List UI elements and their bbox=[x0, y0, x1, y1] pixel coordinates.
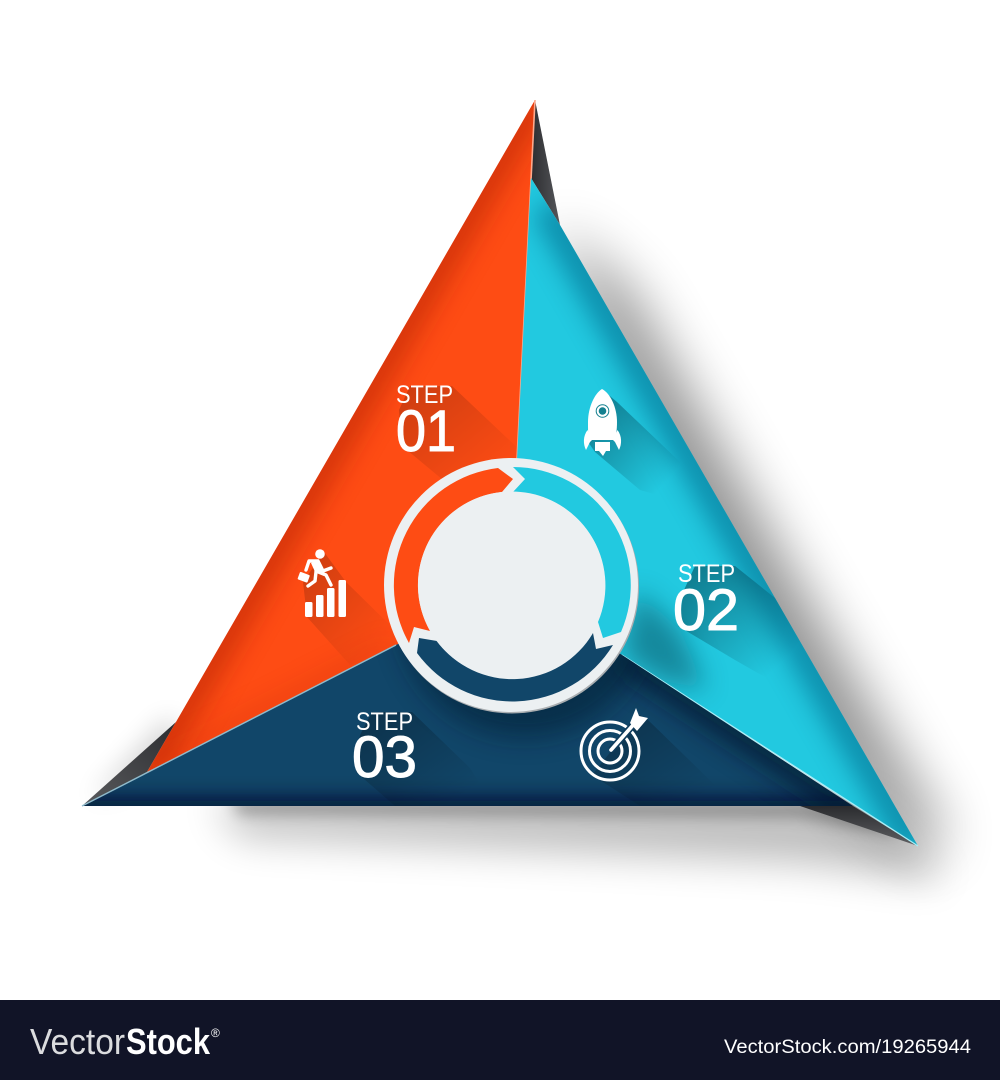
footer logo: Stock bbox=[126, 1021, 211, 1062]
step 03 number: 03 bbox=[352, 725, 417, 790]
long shadow: runner icon bbox=[303, 553, 380, 659]
folded dark tip: left bbox=[82, 722, 176, 806]
arrow: cyan segment bbox=[513, 467, 631, 638]
long shadow: ring on navy bbox=[395, 644, 644, 745]
folded dark tip: right bbox=[800, 806, 918, 846]
center ring with circular arrows bbox=[384, 458, 639, 714]
long shadow: step 02 text bbox=[678, 566, 792, 670]
long shadow: step 01 text bbox=[399, 386, 510, 478]
icon: runner climbing bar chart bbox=[297, 549, 346, 617]
footer image id: VectorStock.com/19265944 bbox=[724, 1036, 971, 1058]
arrow: orange segment bbox=[394, 468, 513, 643]
icon: target with arrow bbox=[581, 708, 648, 780]
footer bar bbox=[0, 1000, 1000, 1080]
footer logo: ® bbox=[211, 1026, 220, 1040]
step 02 number: 02 bbox=[673, 578, 739, 643]
footer logo bbox=[30, 1021, 220, 1062]
long shadow: rocket icon bbox=[589, 395, 672, 491]
folded dark tip: top bbox=[531, 100, 560, 225]
long shadow: target icon bbox=[594, 715, 691, 796]
arrow: navy segment bbox=[417, 633, 613, 701]
panel: step 02 cyan bbox=[511, 178, 918, 846]
step 02 label: STEP bbox=[678, 560, 735, 588]
soft drop shadow behind triangle bbox=[90, 225, 945, 880]
long shadow: step 03 text bbox=[356, 712, 458, 796]
icon: rocket bbox=[584, 389, 621, 456]
step 03 label: STEP bbox=[356, 708, 413, 736]
step 01 label: STEP bbox=[396, 381, 453, 409]
footer logo: Vector bbox=[30, 1021, 125, 1062]
panel: step 01 orange bbox=[147, 100, 535, 772]
center disc bbox=[418, 492, 605, 678]
step 01 number: 01 bbox=[396, 399, 456, 464]
panel: step 03 navy bbox=[82, 644, 853, 806]
long shadow: ring on cyan bbox=[622, 590, 706, 690]
